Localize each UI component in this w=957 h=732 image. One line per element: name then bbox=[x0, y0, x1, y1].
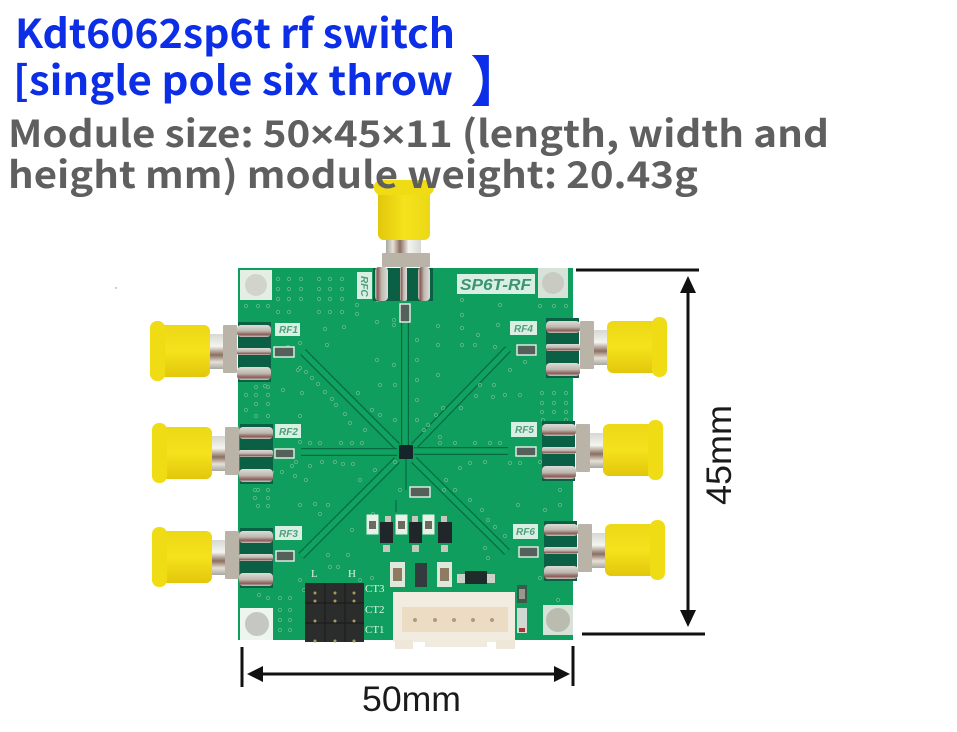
pin header labels bbox=[311, 568, 385, 636]
connector: RFC top bbox=[373, 180, 434, 301]
control circuit components bbox=[367, 515, 527, 633]
pin header labels: CT3 bbox=[365, 583, 385, 595]
signal traces bbox=[301, 320, 508, 556]
dimension: length 50mm: 50mm bbox=[362, 680, 461, 719]
connector: RF6 bbox=[544, 520, 665, 581]
silkscreen labels bbox=[275, 272, 538, 540]
vias bbox=[246, 279, 566, 630]
stray speck bbox=[115, 287, 117, 289]
module size and weight text: Module size: 50 ×45×11 (length, width and bbox=[8, 104, 829, 158]
connector: RF2 bbox=[152, 423, 273, 484]
capacitors bbox=[274, 304, 538, 561]
3x2 pin header bbox=[305, 583, 364, 642]
silkscreen labels: RF2 bbox=[279, 427, 298, 438]
connector: RF3 bbox=[152, 527, 273, 588]
dimension: height 45mm: 45mm bbox=[700, 405, 739, 505]
module size and weight text bbox=[8, 104, 829, 199]
connector: RF1 bbox=[150, 321, 271, 382]
board substrate bbox=[238, 268, 573, 640]
pin header labels: H bbox=[348, 568, 356, 580]
pin header labels: CT1 bbox=[365, 624, 385, 636]
mounting holes bbox=[240, 268, 573, 640]
silkscreen labels: RFC bbox=[358, 276, 369, 297]
title bbox=[13, 2, 524, 117]
pin header labels: CT2 bbox=[365, 604, 385, 616]
silkscreen labels: SP6T-RF bbox=[460, 277, 532, 294]
silkscreen labels: RF3 bbox=[279, 529, 298, 540]
white wire connector bbox=[393, 592, 515, 649]
title: 】 bbox=[470, 38, 524, 117]
connector: RF4 bbox=[546, 317, 667, 378]
circuit board bbox=[238, 268, 573, 649]
silkscreen labels: RF6 bbox=[516, 527, 535, 538]
module size and weight text: height mm) module weight: 20.43g bbox=[8, 145, 698, 199]
silkscreen labels: RF5 bbox=[515, 425, 534, 436]
RF switch IC bbox=[399, 445, 413, 459]
silkscreen labels: RF4 bbox=[514, 324, 533, 335]
silkscreen labels: RF1 bbox=[279, 325, 298, 336]
title: [single pole six throw bbox=[13, 49, 453, 107]
dimension: height 45mm bbox=[576, 270, 739, 634]
dimension: length 50mm bbox=[242, 646, 573, 719]
title: Kdt6062sp6t rf switch bbox=[15, 2, 455, 60]
connector: RF5 bbox=[542, 420, 663, 481]
pin header labels: L bbox=[311, 568, 318, 580]
